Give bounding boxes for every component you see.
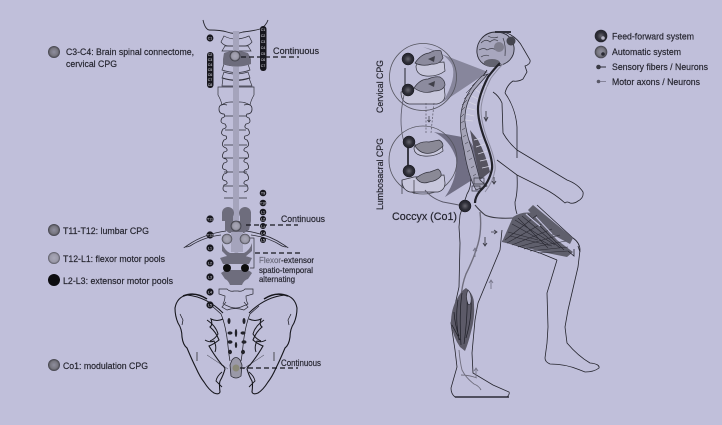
cervical badges left: C5 (208, 68, 212, 72)
thigh underside (502, 241, 557, 260)
back and buttock (459, 70, 487, 227)
legend: Co1 (48, 359, 148, 372)
lumbar badges right: L2 (261, 217, 265, 221)
upper chest and belly front (505, 93, 517, 158)
spine diagram (175, 20, 297, 394)
legend: C3-C4: C3-C4: Brain spinal connectome, (66, 47, 194, 58)
rear shoulder line (493, 92, 517, 150)
sacrum foramina (228, 318, 246, 354)
standing leg (451, 227, 509, 397)
vertebral column (460, 74, 491, 190)
cervical badges left: C1 (208, 36, 212, 40)
cervical zoom lens (390, 44, 456, 110)
legend: automatic system: Automatic system (612, 47, 681, 58)
lumbar badges right: L5 (261, 238, 265, 242)
zoom cone: lumbosacral (434, 132, 488, 197)
legend: Co1: Co1: modulation CPG (63, 361, 148, 372)
lumbar badges right (260, 190, 266, 243)
legend: motor axons: Motor axons / Neurons (612, 77, 700, 88)
lumbar badges right: L1 (261, 210, 265, 214)
ribs (184, 231, 288, 248)
label: Cervical CPG: Cervical CPG (375, 60, 386, 113)
thoracic scallops left (219, 104, 233, 198)
label: Coccyx: Coccyx (Co1) (392, 211, 457, 223)
cervical badges left: C7 (208, 78, 212, 82)
belly below the arm (515, 175, 517, 214)
vertebra level badges (206, 26, 266, 309)
panel: walking body (389, 32, 599, 397)
first thoracic ribs box (218, 87, 254, 105)
L4 and L5 vertebrae (219, 289, 253, 310)
cervical vertebrae (221, 36, 252, 86)
annotation: flexor-extensor alternating: alternating (259, 274, 295, 284)
body labels (375, 60, 457, 223)
cervical badges left (207, 34, 214, 88)
lumbar badges left: L1 (208, 246, 212, 250)
lumbosacral CPG nodes (403, 136, 415, 177)
sacral block (472, 178, 484, 191)
cervical badges left: C2 (208, 53, 212, 57)
legend: C3-C4 (48, 46, 194, 70)
tract connecting CPGs (401, 68, 464, 206)
coccyx CPG node (459, 200, 471, 212)
Co1 marker (232, 364, 240, 372)
legend: C3-C4: cervical CPG (66, 59, 117, 70)
label: Lumbosacral CPG: Lumbosacral CPG (375, 138, 386, 210)
annotation: continuous C3-C4: Continuous (273, 46, 319, 57)
legend: T12-L1: T12-L1: flexor motor pools (63, 254, 165, 265)
cervical badges left: C6 (208, 73, 212, 77)
annotation: flexor-extensor alternating (250, 238, 314, 284)
head and face (495, 32, 530, 93)
cervical CPG nodes (402, 53, 414, 96)
lumbar badges right: L4 (261, 231, 265, 235)
cervical badges right: C3 (261, 40, 265, 44)
annotation: continuous Co1 (240, 358, 321, 368)
cervical badges left: C3 (208, 58, 212, 62)
thigh muscles (502, 205, 580, 257)
legend: sensory fibers: Sensory fibers / Neurons (612, 62, 708, 73)
cervical badges right: C2 (261, 34, 265, 38)
T12-L1 markers (222, 234, 250, 244)
annotation: flexor-extensor alternating: Flexor-extensor (259, 255, 314, 265)
direction arrows (473, 111, 497, 377)
panel: left legend (48, 46, 194, 372)
annotation: continuous T11-T12 (246, 214, 325, 225)
calf muscle (451, 288, 474, 351)
C3-C4 marker (230, 51, 240, 61)
lumbar badges left: L2 (208, 261, 212, 265)
pelvis (175, 294, 297, 394)
lumbosacral zoom lens (389, 126, 457, 194)
legend: T12-L1 (48, 252, 165, 265)
cervical badges right: C6 (261, 58, 265, 62)
cervical badges right (260, 26, 266, 71)
thoracic lower vertebrae (222, 207, 251, 221)
spinal cord band (233, 31, 239, 261)
lumbar badges right: T10 (260, 201, 266, 205)
brain (477, 32, 516, 67)
foot sole (455, 396, 509, 398)
legend: feed-forward system: Feed-forward system (612, 32, 694, 42)
annotation: continuous T11-T12: Continuous (281, 214, 325, 225)
legend: T11-T12 (48, 224, 149, 237)
cervical badges right: C5 (261, 52, 265, 56)
cervical badges right: C1 (261, 28, 265, 32)
T11-T12 marker (231, 221, 241, 231)
zoom cone: cervical (423, 47, 488, 102)
arm and hand (497, 150, 583, 203)
annotation: continuous Co1: Continuous (281, 358, 321, 368)
L2-L3 markers (223, 264, 249, 272)
T11-T12 vertebra (225, 221, 251, 233)
coccyx (230, 358, 242, 378)
lumbar badges left: T11 (207, 217, 213, 221)
cervical badges right: C7 (261, 64, 265, 68)
legend: L2-L3: L2-L3: extensor motor pools (63, 276, 173, 287)
lumbar badges left: L5 (208, 303, 212, 307)
spinal cord tract (459, 63, 513, 390)
panel: right legend (595, 30, 708, 88)
thoracic scallops right (238, 104, 252, 198)
cervical badges left: C8 (208, 83, 212, 87)
lumbar badges right: L3 (261, 224, 265, 228)
C3-C4 segment (223, 51, 251, 66)
lumbar grey body (220, 243, 252, 285)
lumbar badges left: T12 (207, 233, 213, 237)
annotation: continuous C3-C4 (241, 46, 319, 57)
lumbar badges left: L4 (208, 290, 212, 294)
lumbar badges left: L3 (208, 275, 212, 279)
lumbar badges left (206, 215, 214, 309)
cervical badges left: C4 (208, 63, 212, 67)
lumbar badges right: T9 (261, 191, 265, 195)
cervical badges right: C4 (261, 46, 265, 50)
skull base line (203, 20, 268, 34)
legend: T11-T12: T11-T12: lumbar CPG (63, 226, 149, 237)
annotation: flexor-extensor alternating: spatio-temporal (259, 265, 313, 275)
body outline (451, 32, 599, 397)
raised leg and foot (537, 205, 599, 372)
